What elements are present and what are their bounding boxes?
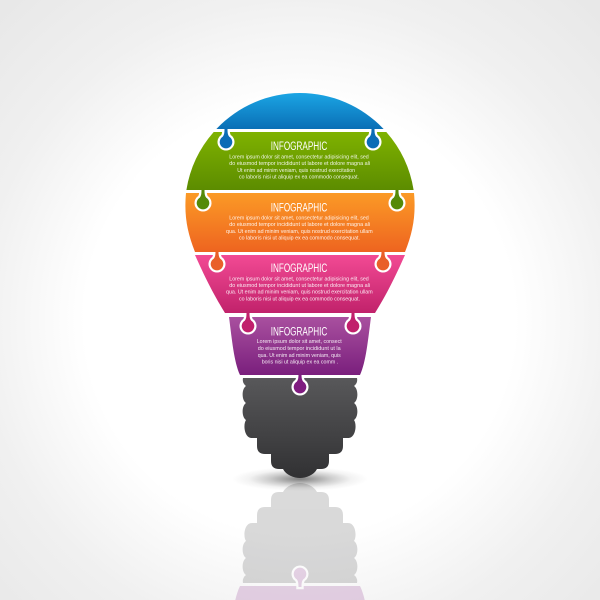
segment: orange: qua. Ut enim ad minim veniam, quis nostrud exercitation ullam	[226, 229, 373, 235]
segment: purple	[229, 313, 371, 375]
segment: purple: qua. Ut enim ad minim veniam, quis	[258, 353, 341, 359]
reflection of the bulb	[235, 483, 365, 600]
segment: pink: qua. Ut enim ad minim veniam, quis nostrud exercitation ullam	[226, 290, 373, 296]
segment: purple: Lorem ipsum dolor sit amet, consect	[257, 339, 342, 345]
reflected purple section	[235, 586, 365, 600]
segment: green: co laboris nisi ut aliquip ex ea commodo consequat.	[239, 175, 359, 181]
segment: pink	[195, 251, 405, 313]
segment: pink: Lorem ipsum dolor sit amet, consectetur adipisicing elit, sed	[229, 276, 369, 282]
segment: purple: INFOGRAPHIC	[271, 326, 327, 338]
segment: orange: co laboris nisi ut aliquip ex ea commodo consequat.	[239, 236, 360, 242]
segment: orange	[185, 190, 415, 252]
segment: purple: boris nisi ut aliquip ex ea comm .	[262, 360, 339, 366]
segment: orange: INFOGRAPHIC	[271, 202, 327, 214]
segment: green: Lorem ipsum dolor sit amet, consectetur adipisicing elit, sed	[229, 154, 369, 160]
segment: green	[186, 129, 414, 190]
floor shadow	[232, 467, 368, 491]
segment: orange: Lorem ipsum dolor sit amet, consectetur adipisicing elit, sed	[229, 216, 369, 222]
segment: green: Ut enim ad minim veniam, quis nostrud exercitation	[237, 168, 355, 174]
light bulb	[185, 93, 415, 478]
segment: dark base	[243, 374, 357, 478]
segment: orange: do eiusmod tempor incididunt ut labore et dolore magna ali	[229, 222, 370, 228]
reflected tab	[294, 568, 306, 587]
reflected base	[243, 483, 357, 583]
segment: purple: do eiusmod tempor incididunt ut la	[258, 346, 341, 352]
segment: pink: co laboris nisi ut aliquip ex ea commodo consequat.	[239, 296, 360, 302]
segment: pink: INFOGRAPHIC	[271, 263, 327, 275]
segment: pink: do eiusmod tempor incididunt ut labore et dolore magna ali	[229, 283, 370, 289]
segment: blue top	[216, 93, 384, 129]
segment: green: INFOGRAPHIC	[271, 141, 327, 153]
segment: green: do eiusmod tempor incididunt ut labore et dolore magna ali	[229, 161, 370, 167]
